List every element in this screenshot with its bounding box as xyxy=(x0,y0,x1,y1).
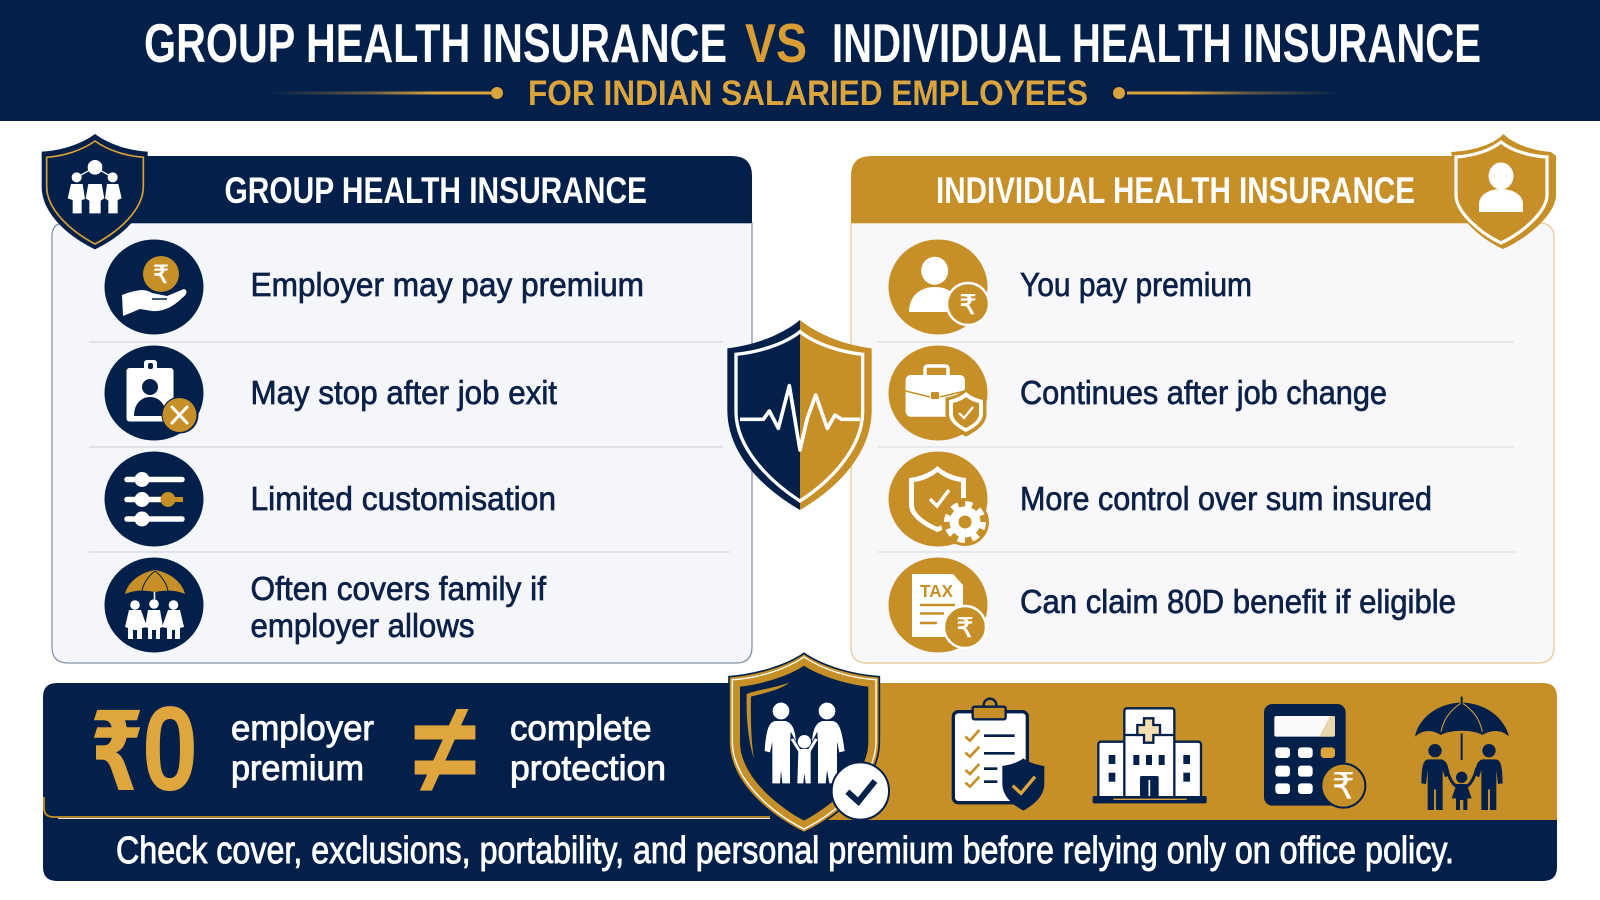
panel: group health insurance xyxy=(52,156,752,663)
banner upper left navy xyxy=(43,683,800,820)
stat: rupee zero: ₹ xyxy=(90,691,144,814)
panel heading: GROUP HEALTH INSURANCE xyxy=(224,170,647,211)
icon: employer pays premium: ₹ xyxy=(153,261,169,289)
row text: more control: More control over sum insured xyxy=(1020,480,1432,517)
subtitle ornaments xyxy=(270,87,1340,99)
text: complete protection: protection xyxy=(510,749,666,788)
row text: continues: Continues after job change xyxy=(1020,374,1387,411)
icon: calculator with rupee xyxy=(1264,704,1365,808)
row text: often covers family: Often covers family if xyxy=(250,570,547,607)
icon: checklist with shield xyxy=(953,699,1044,811)
panel body xyxy=(52,223,752,663)
icon: tax document: TAX xyxy=(920,581,953,601)
icon: sliders xyxy=(104,452,204,546)
bottom banner xyxy=(43,675,1557,881)
icon: shield with gear xyxy=(888,452,989,546)
text: employer premium: premium xyxy=(231,749,364,788)
text: complete protection xyxy=(510,709,666,788)
stat: rupee zero: 0 xyxy=(142,682,198,816)
row text: employer may pay: Employer may pay premium xyxy=(250,266,644,303)
row text: often covers family: employer allows xyxy=(250,607,474,644)
title: VS xyxy=(745,12,807,74)
shield: central heartbeat xyxy=(727,320,872,510)
text: employer premium xyxy=(231,709,374,788)
subtitle: FOR INDIAN SALARIED EMPLOYEES xyxy=(528,74,1088,113)
banner lower strip xyxy=(43,820,1557,881)
panel: individual health insurance xyxy=(851,156,1554,663)
shield: group icon xyxy=(42,134,148,249)
icon: you pay xyxy=(888,240,989,334)
icon: tax document: ₹ xyxy=(956,613,974,643)
panel header bar xyxy=(851,156,1480,223)
row text: limited customisation: Limited customisation xyxy=(250,480,556,517)
row text: often covers family xyxy=(250,570,547,644)
stat: rupee zero xyxy=(90,682,198,816)
shield: individual icon xyxy=(1451,134,1556,249)
panel body xyxy=(851,223,1554,663)
banner upper right gold xyxy=(800,683,1557,820)
symbol: not equal: ≠ xyxy=(413,675,477,821)
icon: tax document xyxy=(888,558,988,652)
shield: family protection xyxy=(729,653,889,833)
icon: employer pays premium xyxy=(104,240,204,334)
icon: umbrella over family xyxy=(1415,697,1509,810)
row text: may stop: May stop after job exit xyxy=(250,374,557,411)
row text: you pay: You pay premium xyxy=(1020,266,1252,303)
header band xyxy=(0,0,1600,121)
icon: calculator with rupee: ₹ xyxy=(1332,766,1355,807)
icon: briefcase shield xyxy=(888,346,988,440)
text: complete protection: complete xyxy=(510,709,652,748)
icon: job exit badge xyxy=(104,346,204,440)
row text: claim 80D: Can claim 80D benefit if eligible xyxy=(1020,583,1456,620)
panel heading: INDIVIDUAL HEALTH INSURANCE xyxy=(936,170,1415,211)
icon: you pay: ₹ xyxy=(959,290,977,320)
title: GROUP HEALTH INSURANCE xyxy=(144,12,727,74)
icon: hospital xyxy=(1093,708,1207,803)
title xyxy=(144,12,1481,74)
text: employer premium: employer xyxy=(231,709,374,748)
icon: umbrella family xyxy=(104,558,204,652)
panel header bar xyxy=(75,156,752,223)
